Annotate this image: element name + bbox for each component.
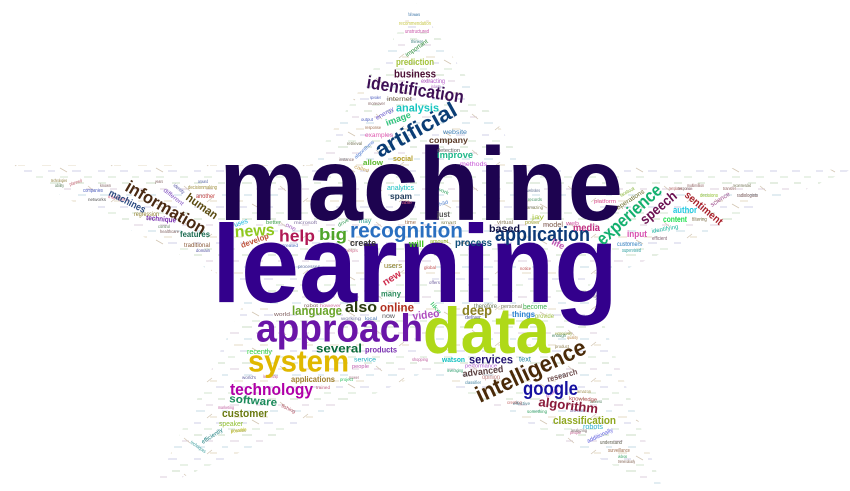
tiny filler words: something <box>527 409 547 414</box>
tiny filler words <box>51 12 751 464</box>
tiny filler words: websites <box>527 188 541 193</box>
main words: watson <box>441 355 465 364</box>
tiny filler words: microsoft <box>294 220 318 225</box>
tiny filler words: recommended <box>733 183 751 188</box>
main words: improve <box>437 150 473 160</box>
tiny filler words: creating <box>507 400 522 405</box>
word: recognition: recognition <box>350 220 463 242</box>
main words: will <box>408 239 424 249</box>
main words: business <box>394 68 436 80</box>
tiny filler words: project <box>340 377 354 382</box>
tiny filler words: tremendously <box>618 459 635 464</box>
tiny filler words: notice <box>520 266 531 271</box>
secondary small words: traditional <box>184 243 210 249</box>
main words: prediction <box>396 57 434 68</box>
main words: new <box>381 268 404 289</box>
word: system: system <box>248 344 349 378</box>
tiny filler words: virtual <box>497 220 513 226</box>
secondary small words: uses <box>233 218 249 229</box>
small rotated words: one <box>284 222 297 233</box>
tiny filler words: quality <box>567 335 579 340</box>
tiny filler words: people <box>570 430 581 435</box>
secondary small words: people <box>352 364 369 370</box>
tiny filler words: world <box>273 312 290 318</box>
tiny filler words: detection <box>570 408 584 413</box>
main words: several <box>316 342 362 356</box>
word: data: data <box>423 294 551 367</box>
word: technology: technology <box>230 380 313 399</box>
secondary small words: amount <box>430 239 448 245</box>
secondary small words: science <box>709 191 732 209</box>
tiny filler words: power <box>525 220 540 226</box>
tiny filler words: enough <box>552 333 566 338</box>
tiny filler words: videos <box>618 454 628 459</box>
secondary small words: text <box>519 356 531 364</box>
main words <box>107 57 725 427</box>
secondary small words: identifying <box>651 224 679 235</box>
main words: online <box>380 302 414 314</box>
main words: many <box>381 290 402 298</box>
secondary small words: radiologists <box>737 193 758 199</box>
main words: customer <box>222 408 269 420</box>
main words: language <box>292 304 342 318</box>
secondary small words: performance <box>465 364 497 370</box>
main words: process <box>455 238 492 249</box>
small rotated words: identify <box>585 290 600 301</box>
secondary small words: personal <box>501 304 522 310</box>
secondary small words: companies <box>83 188 103 194</box>
small rotated words: efficiently <box>201 428 224 446</box>
tiny filler words: time <box>405 220 416 226</box>
tiny filler words: retrieval <box>347 141 362 146</box>
secondary small words: provide <box>535 314 555 320</box>
tiny filler words: model <box>543 222 563 229</box>
main words: classification <box>553 415 616 427</box>
tiny filler words: shopping <box>412 357 428 362</box>
secondary small words: surveillance <box>608 448 630 454</box>
tiny filler words: transfer <box>723 186 736 191</box>
tiny filler words: power <box>349 375 359 380</box>
secondary small words: operations <box>615 188 647 212</box>
secondary small words: decisions <box>700 193 718 199</box>
secondary small words: able <box>402 200 413 205</box>
tiny filler words: web <box>565 221 579 227</box>
main words: create <box>350 238 376 248</box>
main words: image <box>384 110 412 128</box>
secondary small words: decisionmaking <box>188 185 217 191</box>
small rotated words: fishing <box>280 403 296 415</box>
main words: spam <box>390 191 412 201</box>
small rotated words: algorithms <box>353 139 376 160</box>
secondary small words: detection <box>437 148 460 154</box>
main words: research <box>546 367 579 384</box>
tiny filler words: records <box>528 197 543 202</box>
main words: media <box>573 222 600 234</box>
secondary small words: internet <box>387 96 412 103</box>
tiny filler words: goes <box>461 240 471 245</box>
tiny filler words: marketing <box>218 405 234 410</box>
main words: products <box>365 346 398 354</box>
main words: sentiment <box>682 189 725 228</box>
word: learning: learning <box>212 203 618 326</box>
small rotated words: techniques <box>189 440 207 455</box>
small rotated words: work <box>436 186 450 197</box>
tiny filler words: created <box>282 243 299 248</box>
tiny filler words: healthcare <box>160 229 179 234</box>
secondary small words: analytics <box>387 185 414 192</box>
main words: also <box>345 299 377 316</box>
tiny filler words: global <box>424 265 436 270</box>
word: artificial: artificial <box>370 97 461 162</box>
tiny filler words: jay <box>530 215 544 221</box>
small rotated words: called <box>353 164 370 174</box>
main words: big <box>319 225 347 244</box>
main words: speech <box>637 187 680 227</box>
main words: company <box>429 135 468 145</box>
main words: content <box>663 215 687 224</box>
tiny filler words: trained <box>316 385 330 390</box>
tiny filler words: templates <box>669 186 682 191</box>
secondary small words: energy <box>375 107 395 122</box>
tiny filler words: ways <box>405 250 418 256</box>
main words: social <box>393 154 413 163</box>
secondary small words: recently <box>247 349 273 356</box>
main words: services <box>469 354 513 366</box>
small rotated words: society <box>545 387 560 400</box>
main words: just <box>436 210 450 219</box>
secondary small words: supervised <box>622 248 641 254</box>
small rotated words: child <box>436 199 449 209</box>
tiny filler words: smart <box>441 220 457 225</box>
tiny filler words: effective <box>513 401 530 406</box>
main words: software <box>229 393 278 409</box>
tiny filler words: better <box>266 220 281 226</box>
secondary small words: classifier <box>465 380 481 385</box>
tiny filler words: thinker <box>411 39 423 44</box>
secondary small words: deliver <box>465 315 481 321</box>
tiny filler words: technologies <box>51 178 67 183</box>
small rotated words: like <box>428 301 443 317</box>
main words: author <box>673 205 697 216</box>
secondary small words: opinion <box>482 375 500 381</box>
secondary small words: robots <box>583 424 603 431</box>
tiny filler words: amazing <box>527 205 543 210</box>
secondary small words: examples <box>365 132 394 139</box>
tiny filler words: response <box>365 125 381 130</box>
secondary small words: become <box>523 304 547 311</box>
main words: technique <box>146 213 176 225</box>
tiny filler words: process <box>231 428 247 433</box>
secondary small words: regression <box>134 212 159 218</box>
tiny filler words: working <box>341 316 362 321</box>
secondary small words: recommendation <box>399 21 431 27</box>
secondary small words: knowledge <box>569 396 597 403</box>
tiny filler words: amazon <box>577 389 591 394</box>
main words: human <box>183 192 220 222</box>
main words: develop <box>240 231 270 250</box>
small rotated words: facebook <box>619 186 636 199</box>
word: intelligence: intelligence <box>471 334 590 408</box>
tiny filler words: instance <box>339 157 354 162</box>
tiny filler words: around <box>198 179 208 184</box>
tiny filler words: industry <box>431 84 441 89</box>
word: machine: machine <box>219 127 623 243</box>
tiny filler words: leveraging <box>447 368 463 373</box>
tiny filler words: known <box>100 183 111 188</box>
secondary small words: therefore <box>474 304 498 310</box>
secondary small words: filtering <box>692 217 707 223</box>
secondary small words: users <box>384 263 403 270</box>
tiny filler words: analyzing <box>571 428 587 433</box>
small rotated words: planned <box>69 178 83 188</box>
main words: advanced <box>462 364 504 380</box>
main words: features <box>180 229 210 239</box>
small rotated words: identity <box>172 183 186 196</box>
secondary small words: website <box>442 129 467 136</box>
secondary small words: methods <box>460 162 487 168</box>
word: approach: approach <box>256 308 423 350</box>
tiny filler words: world's <box>242 375 257 380</box>
main words: life <box>550 237 566 251</box>
tiny filler words: helps <box>345 248 359 253</box>
main words: things <box>512 309 535 319</box>
main words: help <box>279 226 315 246</box>
main words: video <box>412 308 440 323</box>
small rotated words: drive <box>337 218 350 229</box>
main words: allow <box>363 158 383 167</box>
tiny filler words: speaker <box>370 95 381 100</box>
small rotated words <box>69 139 636 455</box>
tiny filler words: response <box>678 186 692 191</box>
tiny filler words: local <box>365 316 377 321</box>
secondary small words: additionally <box>586 428 614 445</box>
main words: applications <box>291 374 335 384</box>
tiny filler words: followers <box>408 12 421 17</box>
tiny filler words: control <box>158 224 170 229</box>
secondary small words: networks <box>88 197 107 202</box>
secondary small words: another <box>196 194 215 200</box>
tiny filler words: extensively <box>555 331 573 336</box>
tiny filler words: processes <box>298 264 321 269</box>
tiny filler words: however <box>320 303 342 308</box>
tiny filler words: years <box>155 179 164 184</box>
tiny filler words: business <box>590 399 603 404</box>
main words: machines <box>107 188 148 216</box>
word: google: google <box>523 379 578 400</box>
secondary small words: different <box>162 188 185 208</box>
secondary small words: efficient <box>652 236 668 242</box>
secondary small words: speaker <box>219 421 244 428</box>
secondary small words: customers <box>617 242 642 248</box>
tiny filler words: robot <box>304 303 319 308</box>
tiny filler words: leadership <box>263 374 278 379</box>
secondary small words: unstructured <box>405 29 429 35</box>
tiny filler words: multimillion <box>687 183 704 188</box>
secondary small words: understand <box>600 440 622 446</box>
word: application: application <box>495 224 590 246</box>
secondary small words: service <box>354 356 376 364</box>
word: identification: identification <box>365 72 465 107</box>
main words: input <box>627 229 647 239</box>
tiny filler words: ability <box>55 183 65 188</box>
small rotated words: intelligent <box>108 194 129 204</box>
small rotated words: possible <box>230 427 247 435</box>
tiny filler words: domain <box>196 248 210 253</box>
tiny filler words: now <box>382 314 396 320</box>
tiny filler words: output <box>361 117 374 122</box>
main words: analysis <box>396 102 439 114</box>
main words: news <box>234 222 275 241</box>
tiny filler words: product <box>555 344 570 349</box>
main words: based <box>489 223 520 235</box>
tiny filler words: offers <box>429 280 441 285</box>
secondary small words: extracting <box>421 79 445 85</box>
secondary small words: platform <box>594 199 616 205</box>
main words: algorithm <box>538 394 599 416</box>
secondary small words <box>83 21 758 454</box>
main words: deep <box>462 302 492 318</box>
word: experience: experience <box>592 180 666 249</box>
word: information: information <box>122 177 209 238</box>
small rotated words: may <box>359 218 372 225</box>
tiny filler words: moreover <box>368 101 385 106</box>
secondary small words: important <box>405 39 430 59</box>
